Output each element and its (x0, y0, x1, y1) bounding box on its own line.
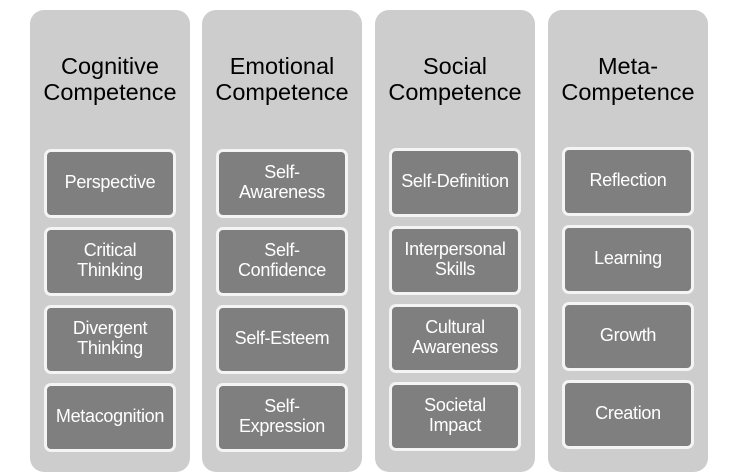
box: growth: Growth (600, 325, 656, 345)
box: reflection (562, 147, 694, 216)
box: learning: Learning (594, 248, 662, 268)
box: metacognition (44, 383, 176, 452)
box: self-awareness: Awareness (239, 182, 325, 202)
box: creation (562, 380, 694, 449)
heading: meta (561, 53, 695, 105)
box: self-esteem: Self-Esteem (235, 328, 329, 348)
box: metacognition: Metacognition (56, 406, 164, 426)
box: divergent thinking: Thinking (77, 338, 143, 358)
box: self-expression: Expression (239, 416, 325, 436)
box: critical thinking: Thinking (77, 260, 143, 280)
box: societal impact: Impact (429, 415, 481, 435)
box: cultural awareness: Awareness (412, 337, 498, 357)
panel: cognitive competence (30, 10, 190, 472)
box: self-definition: Self-Definition (401, 171, 509, 191)
heading: cognitive (43, 53, 177, 105)
box: growth (562, 302, 694, 371)
box: self-definition (389, 148, 521, 217)
box: perspective (44, 149, 176, 218)
box: self-confidence: Confidence (238, 260, 326, 280)
box: critical thinking (44, 227, 176, 296)
box: perspective: Perspective (65, 172, 155, 192)
heading: emotional: Competence (215, 79, 349, 105)
box: divergent thinking: Divergent (73, 318, 147, 338)
box: learning (562, 225, 694, 294)
box: societal impact: Societal (424, 395, 486, 415)
heading: emotional (215, 53, 349, 105)
box: interpersonal skills: Interpersonal (404, 239, 506, 259)
box: interpersonal skills (389, 226, 521, 295)
panel: meta-competence (548, 10, 708, 472)
heading: social: Competence (388, 79, 522, 105)
box: critical thinking: Critical (84, 240, 136, 260)
heading: emotional: Emotional (230, 53, 334, 79)
heading: social (388, 53, 522, 105)
box: creation: Creation (595, 403, 661, 423)
box: self-expression (216, 383, 348, 452)
heading: meta: Competence (561, 79, 695, 105)
heading: cognitive: Competence (43, 79, 177, 105)
box: self-confidence (216, 227, 348, 296)
heading: social: Social (423, 53, 487, 79)
heading: meta: Meta- (598, 53, 658, 79)
box: self-awareness (216, 149, 348, 218)
box: reflection: Reflection (589, 170, 667, 190)
box: cultural awareness: Cultural (425, 317, 485, 337)
box: cultural awareness (389, 304, 521, 373)
box: self-esteem (216, 305, 348, 374)
box: self-confidence: Self- (264, 240, 300, 260)
heading: cognitive: Cognitive (61, 53, 159, 79)
box: interpersonal skills: Skills (435, 259, 475, 279)
box: self-awareness: Self- (264, 162, 300, 182)
box: self-expression: Self- (264, 396, 300, 416)
box: societal impact (389, 382, 521, 451)
box: divergent thinking (44, 305, 176, 374)
panel: emotional competence (202, 10, 362, 472)
panel: social competence (375, 10, 535, 472)
